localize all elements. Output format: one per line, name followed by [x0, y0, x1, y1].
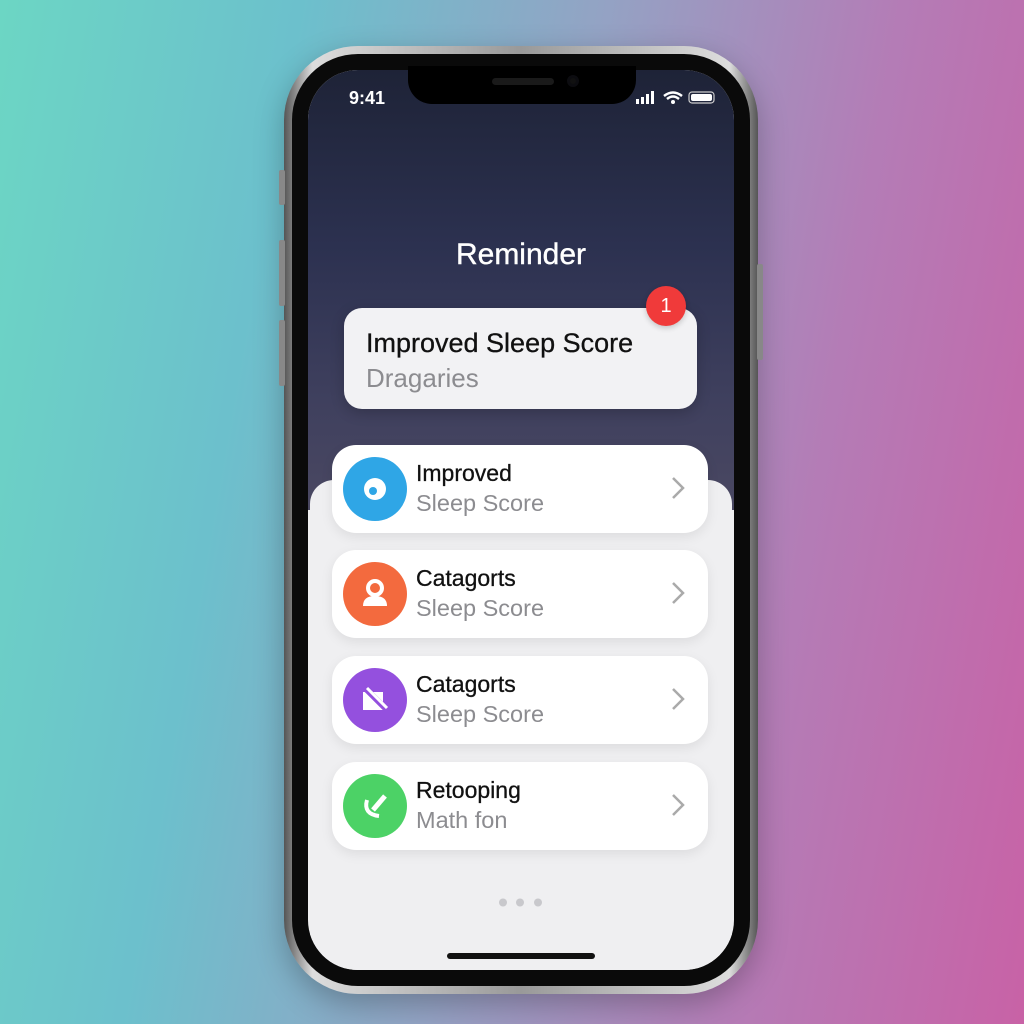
light panel: [310, 480, 732, 980]
list item 2: [332, 550, 708, 638]
side buttons: [279, 170, 285, 205]
screen: [308, 70, 734, 970]
home indicator: [447, 953, 595, 959]
list item 3: Catagorts: [416, 671, 516, 697]
page dots: [499, 898, 542, 906]
heading: Reminder: [456, 238, 586, 271]
phone: [284, 46, 758, 994]
list item 2: Catagorts: [416, 565, 516, 591]
list item 4: Math fon: [416, 807, 507, 833]
list item 3: Sleep Score: [416, 701, 544, 727]
notification card: Improved Sleep Score: [366, 328, 633, 358]
list item 3: [332, 656, 708, 744]
list item 4: Retooping: [416, 777, 521, 803]
list item 1: Sleep Score: [416, 490, 544, 516]
notification card: Dragaries: [366, 363, 479, 393]
notification card: [344, 308, 697, 409]
list item 2: Sleep Score: [416, 595, 544, 621]
badge: 1: [660, 295, 672, 317]
badge: [646, 286, 686, 326]
notch: [408, 66, 636, 104]
status time: 9:41: [349, 88, 385, 108]
list item 1: Improved: [416, 460, 512, 486]
list item 4: [332, 762, 708, 850]
status icons: [636, 91, 715, 104]
list item 1: [332, 445, 708, 533]
